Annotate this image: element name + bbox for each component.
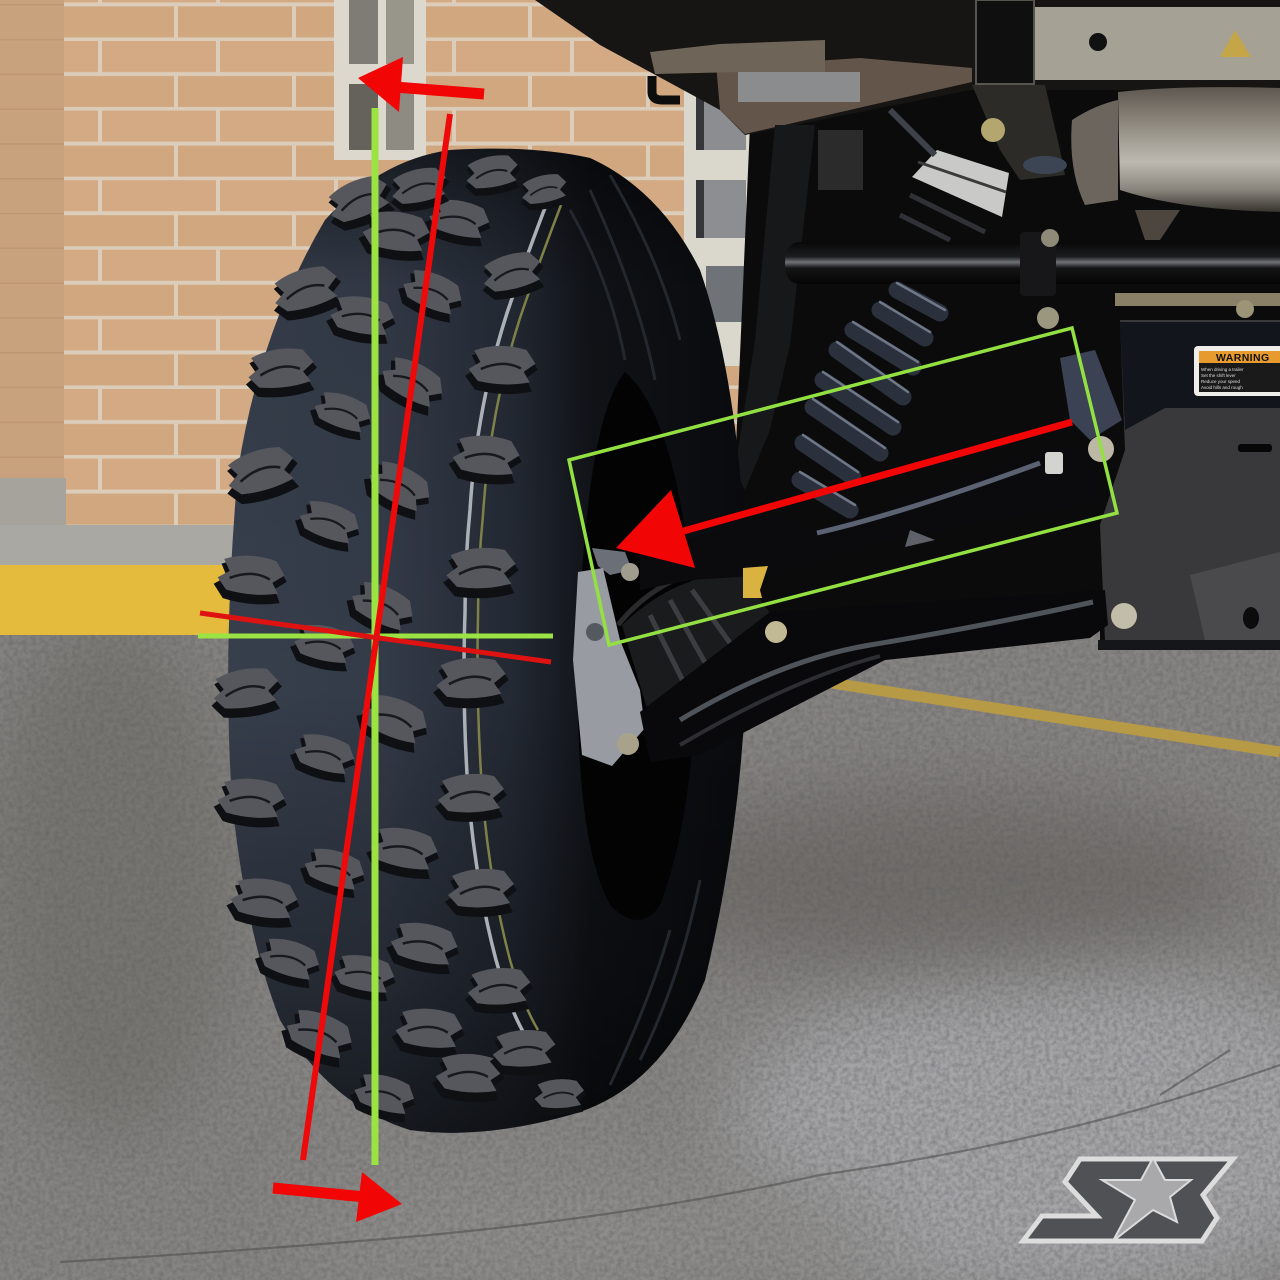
- frame upright: [972, 85, 1065, 180]
- background: brick wall: [0, 0, 760, 525]
- rail hole: [1089, 33, 1107, 51]
- cross bar: [785, 242, 1280, 284]
- front knuckle and CV boot: [573, 548, 775, 766]
- yellow kerb: [0, 565, 770, 635]
- muffler rear neck: [1071, 100, 1118, 205]
- arm skid glint: [905, 530, 935, 547]
- overlay: highlighted upper control arm box: [569, 328, 1117, 645]
- blue frame glint: [1023, 156, 1067, 174]
- hose hook: [652, 76, 680, 100]
- overlay: horizontal reference line: [198, 634, 553, 638]
- tread lugs, inner row: [433, 152, 586, 1115]
- bumper plate: [716, 58, 972, 134]
- background: asphalt ground: [0, 620, 1280, 1280]
- shock coil top: [900, 195, 985, 240]
- bolts: [586, 118, 1254, 755]
- overlay: cambered wheel cross line: [200, 613, 551, 662]
- yellow parking line: [825, 682, 1280, 752]
- frame rail: [1035, 7, 1280, 80]
- sidewall streaks: [570, 175, 700, 1085]
- overlay: cambered wheel axis line: [303, 114, 450, 1160]
- lower A-arm: [640, 590, 1108, 762]
- yellow kerb gap behind arm: [743, 566, 768, 598]
- bracket box: [976, 0, 1034, 84]
- warning sticker: WARNING: [1216, 352, 1270, 364]
- sidewall white stripe: [464, 200, 548, 1035]
- arrow: top of wheel tilts left: [358, 57, 484, 112]
- side strut: [735, 125, 815, 490]
- vehicle undercarriage: [535, 0, 1280, 655]
- grey bumper block: [738, 72, 860, 102]
- silver shock cap: [912, 150, 1009, 217]
- coil spring: [800, 283, 945, 510]
- pavement cracks: [60, 1050, 1280, 1262]
- warning sticker: When driving a trailer: [1201, 367, 1244, 372]
- arrow: control arm pushes the wheel: [616, 422, 1072, 568]
- warning sticker: Set the shift lever: [1201, 373, 1236, 378]
- shock band: [918, 162, 1006, 192]
- tire: [208, 149, 747, 1133]
- glass block window, right: [684, 66, 760, 366]
- inner strut panel: [818, 130, 863, 190]
- tan bumper casting: [650, 40, 825, 74]
- glass block window, upper: [334, 0, 426, 160]
- heat shield stub: [1135, 210, 1180, 240]
- warning triangle sticker: [1220, 30, 1251, 57]
- tan strip behind bar: [1115, 293, 1280, 306]
- upper A-arm: [640, 445, 1100, 590]
- tread lugs, centre row: [286, 164, 507, 1128]
- wheel rim: [578, 372, 696, 920]
- warning sticker: Reduce your speed: [1201, 379, 1241, 384]
- blue frame patch: [1060, 350, 1122, 440]
- sidewalk: [0, 478, 760, 568]
- logo: S3 star mark: [1023, 1158, 1233, 1241]
- bar clamp: [1020, 232, 1056, 296]
- sidewall olive stripe: [478, 205, 561, 1030]
- muffler: [1118, 87, 1280, 212]
- skid plate and warning sticker: [1060, 320, 1280, 650]
- upper arm highlight: [817, 463, 1040, 533]
- arrow: bottom of wheel tilts right: [273, 1172, 402, 1222]
- warning sticker: [1194, 346, 1280, 396]
- shock rod: [890, 110, 935, 155]
- warning sticker: Avoid hills and rough: [1201, 385, 1243, 390]
- overlay: true vertical reference line: [372, 108, 378, 1165]
- tread lugs, outer row: [208, 170, 400, 1074]
